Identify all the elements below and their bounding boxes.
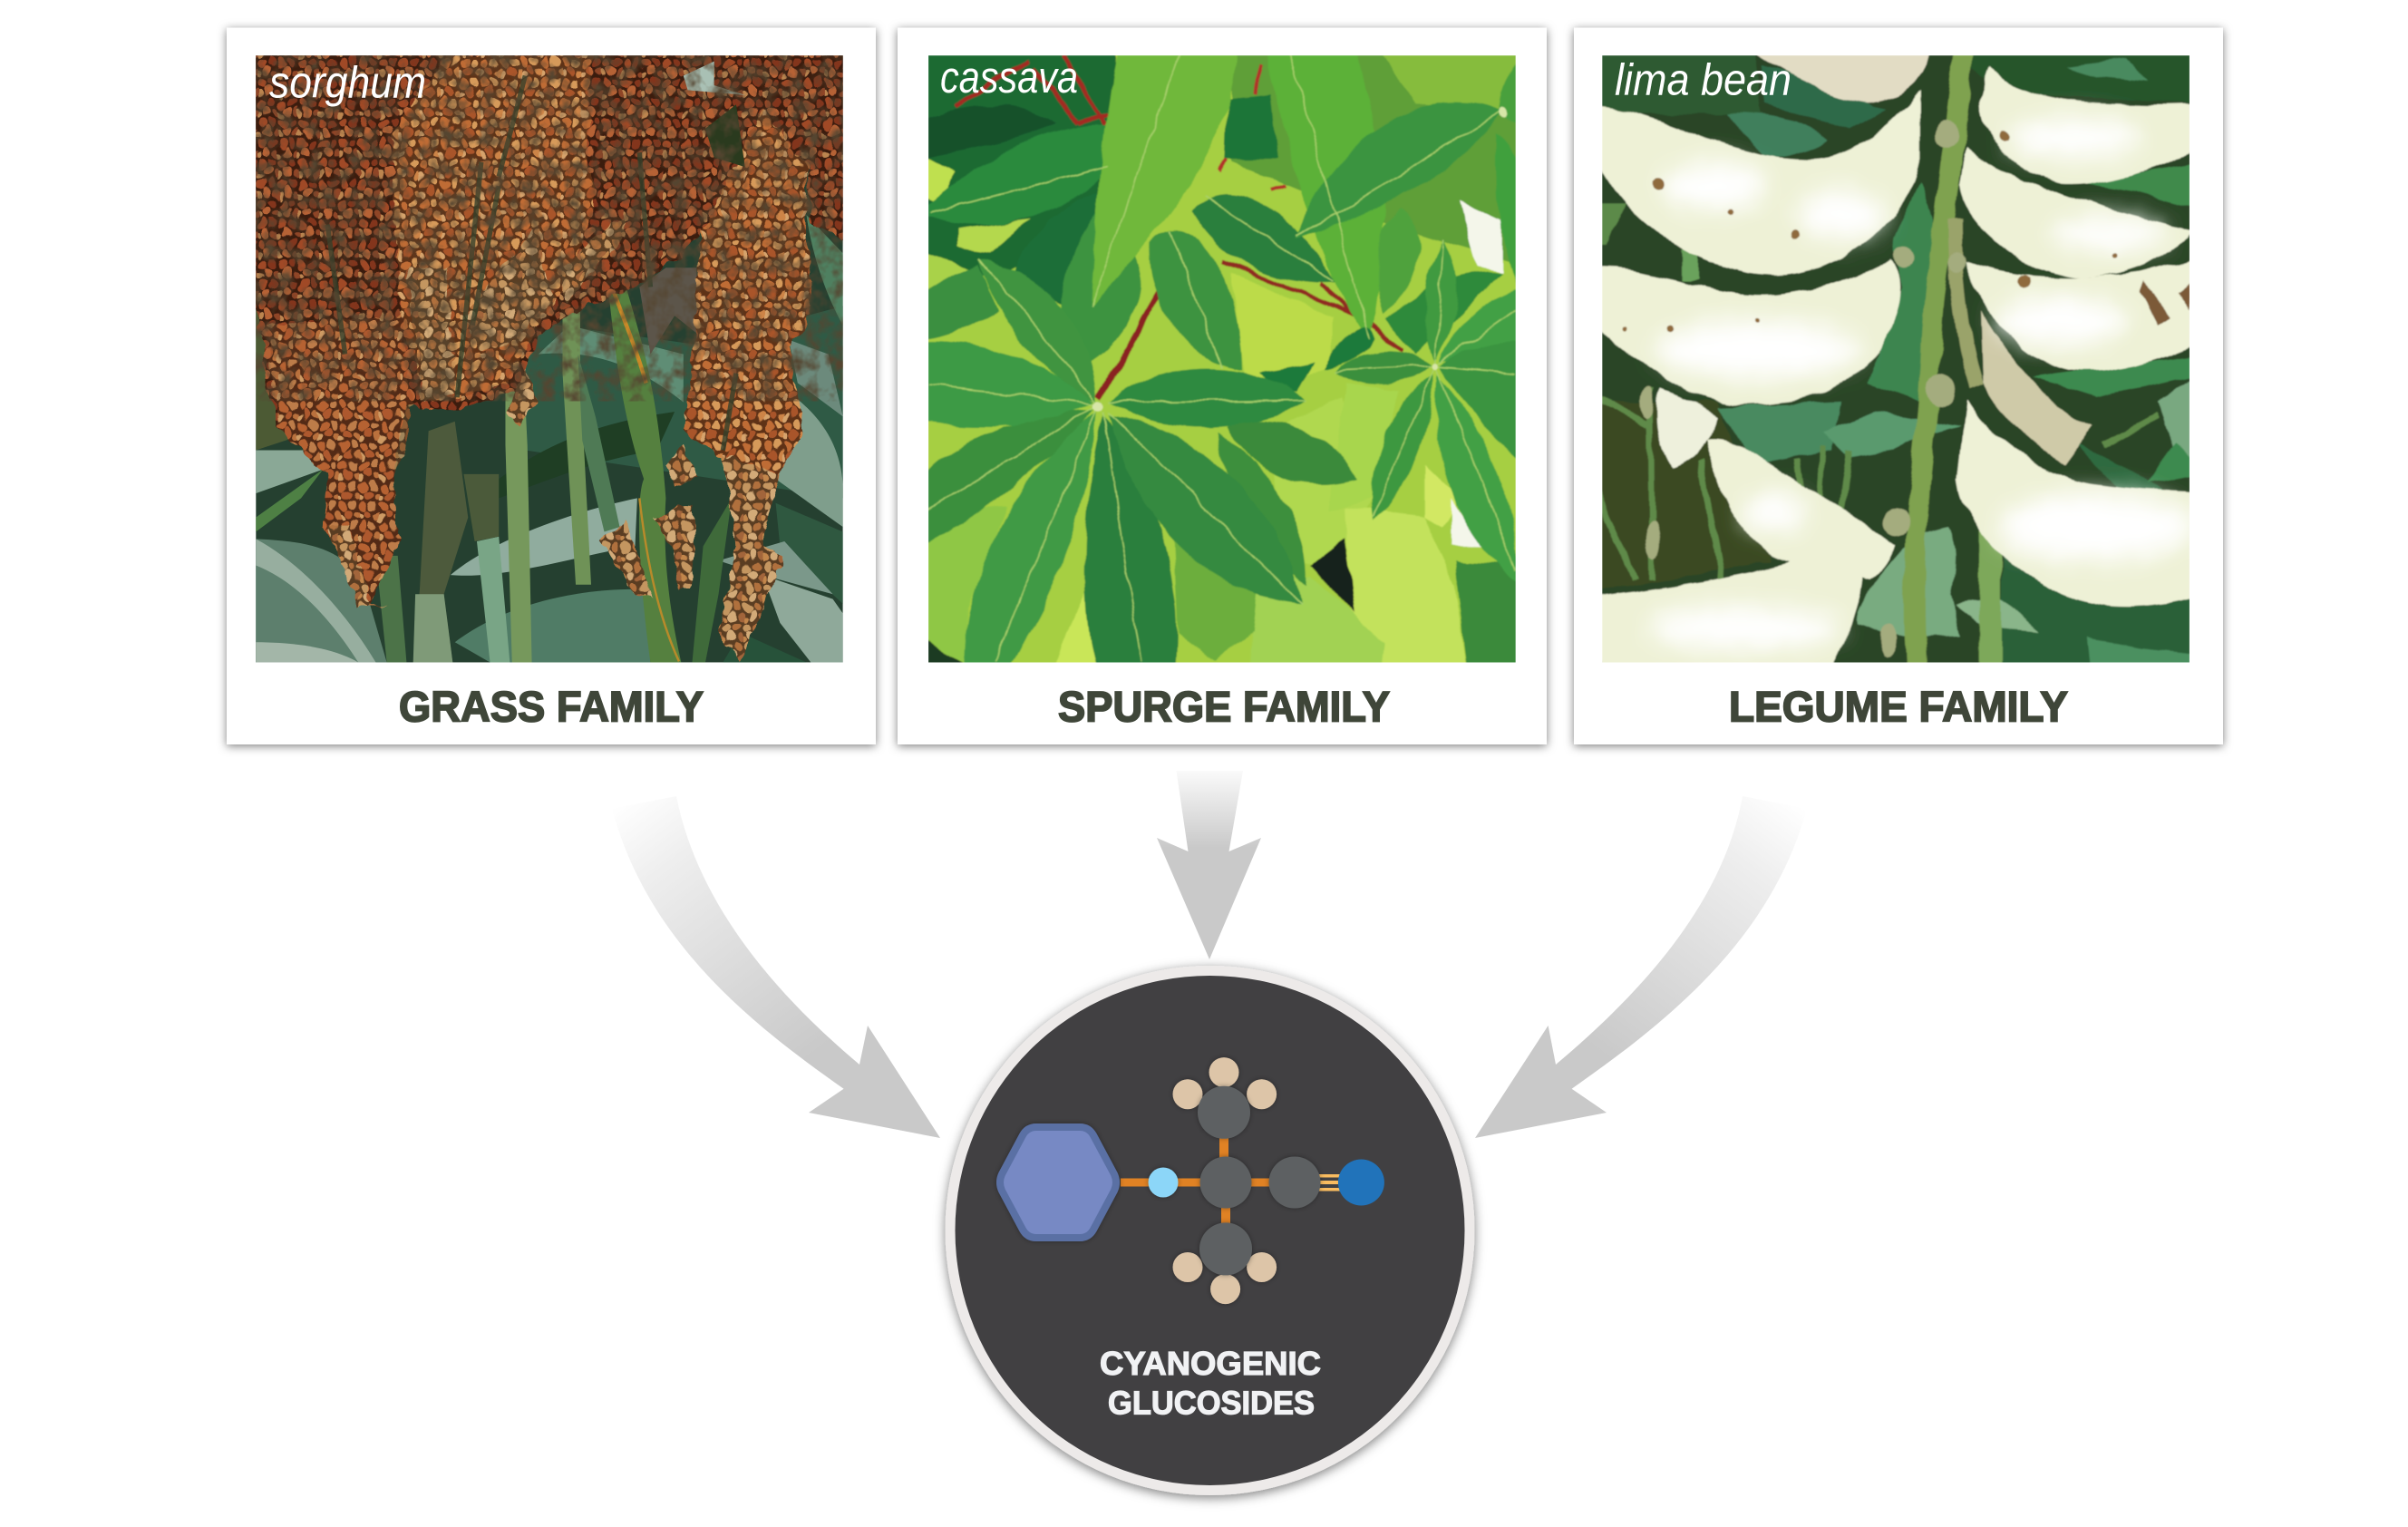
panel: spurge family <box>898 27 1547 744</box>
icon: triple bond <box>1318 1174 1340 1191</box>
icon: carbon atoms <box>1198 1086 1320 1275</box>
icon: nitrogen atom <box>1338 1159 1384 1206</box>
photo: lima bean <box>1602 55 2190 662</box>
caption: legume family: LEGUME FAMILY <box>1729 682 2068 731</box>
arrow: grass family to compound <box>612 796 940 1138</box>
label: cyanogenic glucosides: GLUCOSIDES <box>1108 1384 1315 1422</box>
label: cyanogenic glucosides: CYANOGENIC <box>1100 1345 1321 1382</box>
grain clusters <box>244 47 855 661</box>
panel: grass family <box>227 27 876 744</box>
photo: cassava <box>928 55 1516 662</box>
panel: legume family <box>1574 27 2223 744</box>
icon: bonds <box>1121 1133 1298 1237</box>
caption: spurge family: SPURGE FAMILY <box>1058 682 1390 731</box>
icon: oxygen atom <box>1148 1168 1179 1197</box>
species label: cassava: cassava <box>940 53 1078 102</box>
panel: cyanogenic glucosides badge <box>945 966 1474 1495</box>
icon: glucose hexagon <box>1000 1127 1116 1238</box>
icon: hydrogen atoms <box>1173 1057 1277 1304</box>
species label: sorghum: sorghum <box>269 58 426 107</box>
arrow: spurge family to compound <box>1157 771 1261 959</box>
species label: lima bean: lima bean <box>1615 56 1791 105</box>
caption: grass family: GRASS FAMILY <box>399 682 704 731</box>
photo: sorghum <box>244 47 855 662</box>
pod highlights <box>1647 119 2192 649</box>
label: cyanogenic glucosides <box>1100 1345 1321 1422</box>
molecule diagram <box>1000 1057 1384 1304</box>
arrow: legume family to compound <box>1475 796 1807 1138</box>
